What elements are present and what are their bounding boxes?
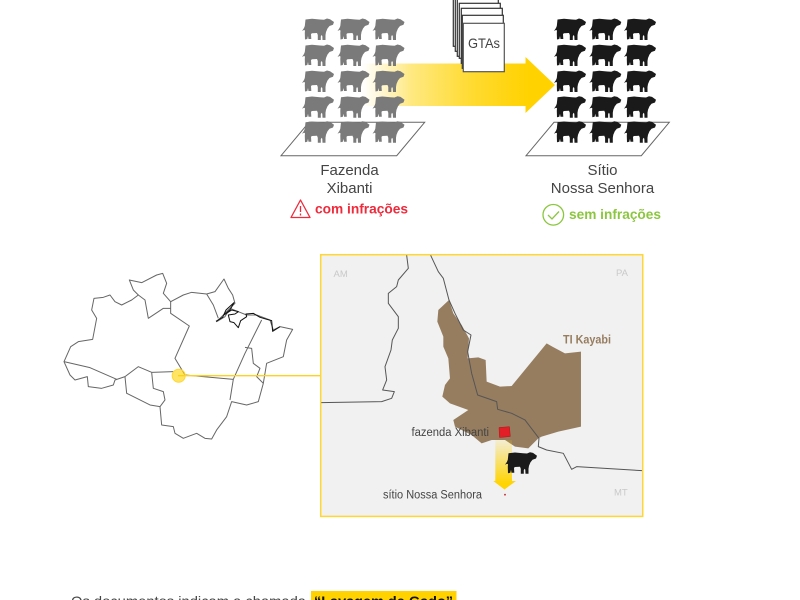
label: Fazenda Xibanti: Fazenda xyxy=(320,162,379,179)
label: Fazenda Xibanti: Xibanti xyxy=(327,180,372,197)
state borders xyxy=(321,255,642,471)
state labels xyxy=(334,268,629,498)
connector line xyxy=(178,375,321,377)
highlighted text background xyxy=(311,591,456,600)
label: Fazenda Xibanti xyxy=(320,162,379,197)
label: sítio Nossa Senhora: sítio Nossa Senhora xyxy=(383,490,483,502)
plot: Fazenda Xibanti xyxy=(281,122,425,156)
marker: fazenda Xibanti xyxy=(499,427,510,438)
label: Sítio Nossa Senhora: Nossa Senhora xyxy=(551,180,655,197)
icon: warning triangle xyxy=(291,200,310,218)
state labels: AM xyxy=(334,269,348,280)
status: com infrações: com infrações xyxy=(315,202,408,216)
marker: sítio xyxy=(504,494,506,496)
body text xyxy=(71,593,453,600)
location marker xyxy=(172,369,185,382)
status: sem infrações: sem infrações xyxy=(569,207,661,222)
arrow: to sítio xyxy=(493,440,516,490)
plot: Sítio Nossa Senhora xyxy=(526,122,669,156)
stack of GTA documents: GTAs xyxy=(468,35,500,51)
label: Sítio Nossa Senhora xyxy=(551,162,655,197)
stack of GTA documents xyxy=(453,0,504,72)
cattle herd: black xyxy=(554,18,656,143)
label: TI Kayabi: TI Kayabi xyxy=(563,334,611,346)
icon: check circle xyxy=(543,204,564,225)
label: fazenda Xibanti: fazenda Xibanti xyxy=(412,427,489,439)
label: Sítio Nossa Senhora: Sítio xyxy=(587,162,618,179)
cattle herd: grey xyxy=(302,18,404,143)
map: Legal Amazon states xyxy=(64,273,293,439)
state labels: PA xyxy=(616,268,629,279)
territory: TI Kayabi xyxy=(437,300,581,448)
panel: detail map xyxy=(321,255,643,516)
state labels: MT xyxy=(614,488,628,498)
icon: black cow xyxy=(505,452,537,474)
arrow: cattle transfer xyxy=(362,57,555,113)
